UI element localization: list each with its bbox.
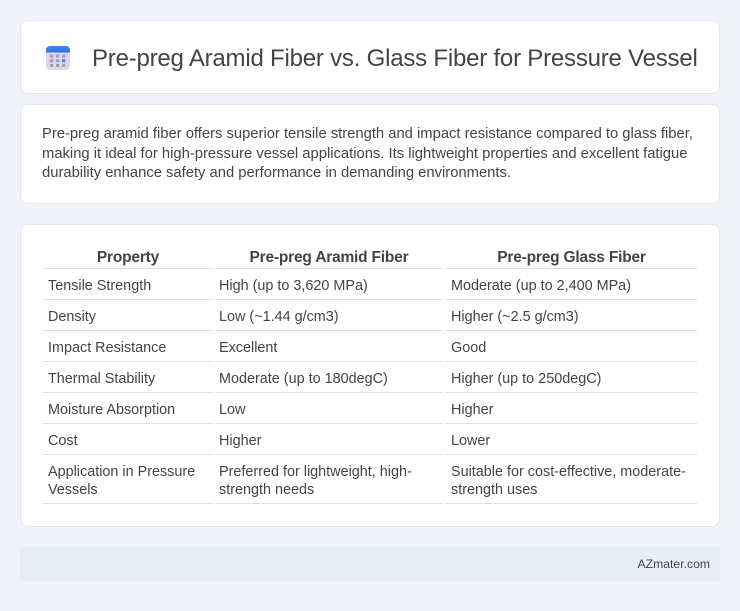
- table header row: Property: [97, 249, 159, 266]
- row: tensile strength: High (up to 3,620 MPa): [219, 278, 368, 294]
- row: application in pressure vessels: Preferred for lightweight, high-: [219, 464, 412, 480]
- row: impact resistance: Excellent: [219, 340, 277, 356]
- icon: calendar grid: [46, 46, 70, 70]
- row: moisture absorption: Low: [219, 402, 245, 418]
- row: thermal stability: Moderate (up to 180degC): [219, 371, 388, 387]
- row: cost: Cost: [48, 433, 78, 449]
- footer bar: [20, 547, 720, 581]
- row: application in pressure vessels: strength uses: [451, 482, 537, 498]
- row: tensile strength: Tensile Strength: [48, 278, 151, 294]
- summary paragraph: making it ideal for high-pressure vessel applications. Its lightweight properties and excellent fatigue: [42, 146, 687, 162]
- row: thermal stability: Thermal Stability: [48, 371, 155, 387]
- table header row: [97, 249, 646, 266]
- footer credit: AZmater.com: [638, 557, 710, 571]
- summary paragraph: [42, 126, 693, 181]
- title: Pre-preg Aramid Fiber vs. Glass Fiber for Pressure Vessel: [92, 45, 698, 72]
- row: impact resistance: [48, 340, 486, 356]
- row: thermal stability: [48, 371, 601, 387]
- row: moisture absorption: Higher: [451, 402, 493, 418]
- row: moisture absorption: Moisture Absorption: [48, 402, 175, 418]
- row: impact resistance: Impact Resistance: [48, 340, 166, 356]
- row: cost: Higher: [219, 433, 261, 449]
- row: moisture absorption: [48, 402, 494, 418]
- row: density: Density: [48, 309, 96, 325]
- row: application in pressure vessels: Vessels: [48, 482, 98, 498]
- row: thermal stability: Higher (up to 250degC): [451, 371, 601, 387]
- summary paragraph: durability enhance safety and performance in demanding environments.: [42, 165, 511, 181]
- panel: summary text: [20, 104, 720, 204]
- row: tensile strength: [48, 278, 631, 294]
- row: application in pressure vessels: Application in Pressure: [48, 464, 195, 480]
- summary paragraph: Pre-preg aramid fiber offers superior tensile strength and impact resistance compared to glass fiber,: [42, 126, 693, 142]
- table header row: Pre-preg Aramid Fiber: [250, 249, 408, 266]
- row: application in pressure vessels: strength needs: [219, 482, 314, 498]
- row: impact resistance: Good: [451, 340, 486, 356]
- row: density: [48, 309, 579, 325]
- row: cost: Lower: [451, 433, 490, 449]
- row: tensile strength: Moderate (up to 2,400 MPa): [451, 278, 631, 294]
- panel: comparison table: [20, 224, 720, 527]
- row: density: Low (~1.44 g/cm3): [219, 309, 339, 325]
- table header row: Pre-preg Glass Fiber: [497, 249, 646, 266]
- row: application in pressure vessels: Suitable for cost-effective, moderate-: [451, 464, 686, 480]
- row: cost: [48, 433, 490, 449]
- row: density: Higher (~2.5 g/cm3): [451, 309, 579, 325]
- row: application in pressure vessels: [48, 464, 686, 498]
- panel: title header: [20, 20, 720, 94]
